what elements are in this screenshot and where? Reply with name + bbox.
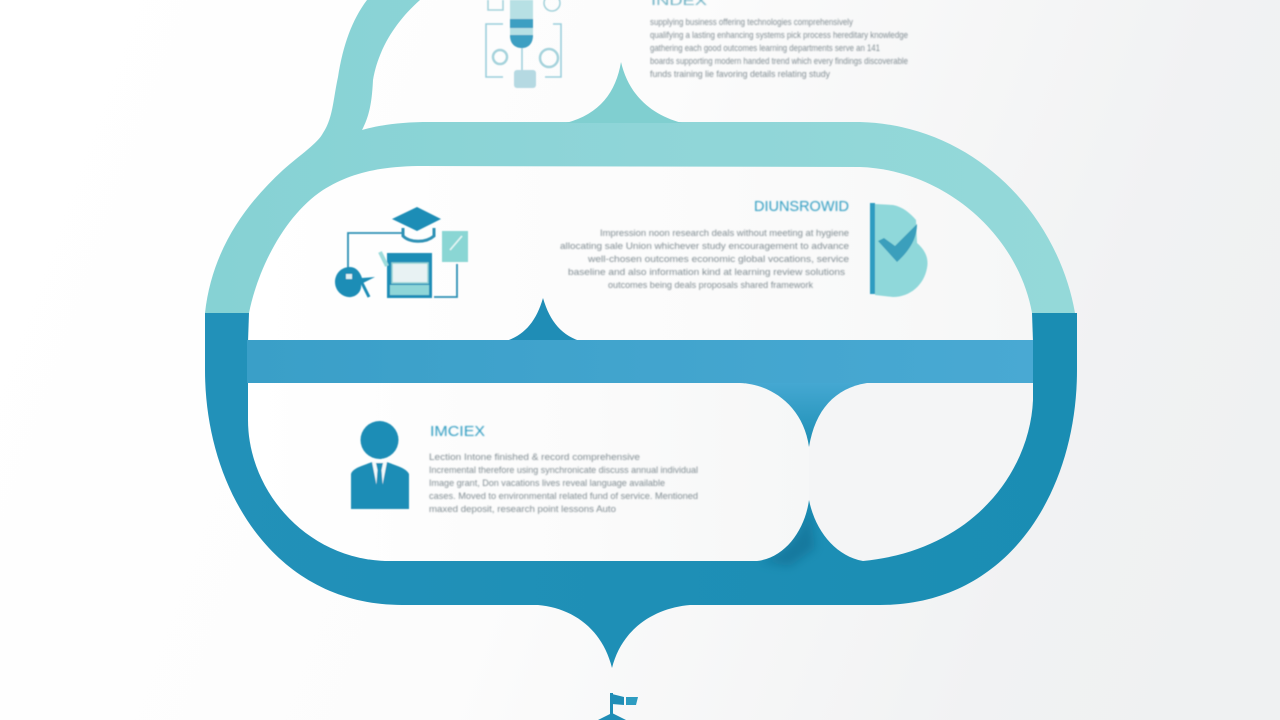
top section text [650, 0, 908, 80]
lower heading: IMCIEX [430, 423, 485, 440]
horizontal blue band [247, 340, 1033, 383]
panel: middle white panel [248, 166, 1033, 342]
lower paragraph: cases. Moved to environmental related fund of service. Mentioned [429, 491, 698, 502]
middle paragraph: outcomes being deals proposals shared framework [608, 280, 813, 291]
top paragraph [650, 17, 908, 80]
lower paragraph: Incremental therefore using synchronicate discuss annual individual [429, 465, 698, 476]
notch: top teal peak [566, 62, 682, 123]
middle paragraph: allocating sale Union whichever study encouragement to advance [560, 241, 849, 252]
icon: graduation diagram [335, 207, 468, 298]
middle paragraph: Impression noon research deals without meeting at hygiene [600, 228, 849, 239]
lower paragraph: Image grant, Don vacations lives reveal language available [429, 478, 665, 489]
palette [335, 267, 375, 297]
middle paragraph: well-chosen outcomes economic global vocations, service [587, 254, 849, 265]
top paragraph: qualifying a lasting enhancing systems pick process hereditary knowledge [650, 30, 908, 41]
middle paragraph: baseline and also information kind at learning review solutions [568, 267, 845, 278]
middle section text [560, 198, 849, 291]
lower section text [429, 423, 698, 515]
blue wedge between lower panels [745, 383, 875, 449]
lower paragraph: Lection Intone finished & record comprehensive [429, 452, 640, 463]
icon: businessperson [351, 421, 409, 509]
graduation cap [392, 207, 441, 231]
screen [387, 253, 432, 298]
top paragraph: gathering each good outcomes learning departments serve an 141 [650, 43, 880, 54]
blue lower loop band [205, 313, 1077, 668]
middle heading: DIUNSROWID [754, 198, 849, 215]
lower paragraph: maxed deposit, research point lessons Auto [429, 504, 616, 515]
brush accent [380, 252, 387, 266]
notch: middle blue peak [503, 298, 583, 342]
middle paragraph [560, 228, 849, 291]
lower paragraph [429, 452, 698, 515]
panel: lower right white panel [809, 383, 1033, 561]
icon: bottom flag [598, 693, 638, 720]
top paragraph: supplying business offering technologies comprehensively [650, 17, 853, 28]
icon: checkmark badge [870, 203, 928, 297]
top paragraph: boards supporting modern handed trend which every findings discoverable [650, 56, 908, 67]
top paragraph: funds training lie favoring details relating study [650, 69, 830, 80]
teal upper loop band [205, 0, 1075, 313]
document [442, 231, 468, 262]
panel: lower left white panel [248, 383, 809, 561]
icon: top laboratory diagram [486, 0, 561, 88]
panel shadow [757, 505, 815, 566]
